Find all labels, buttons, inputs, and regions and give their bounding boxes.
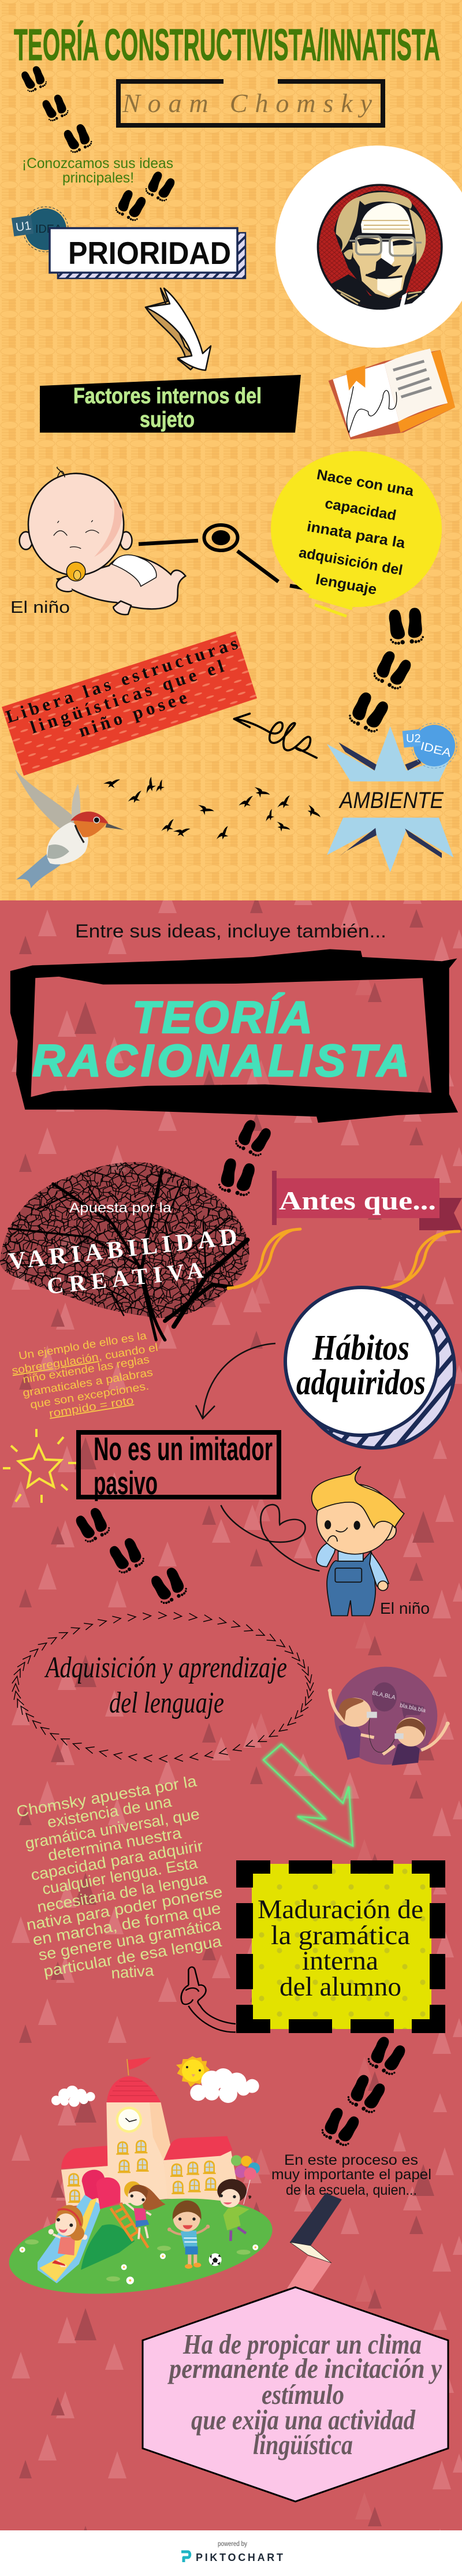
arrow: spiral from ambiente xyxy=(234,714,316,758)
icon: baby xyxy=(20,467,185,615)
footprints: to prioridad xyxy=(114,170,177,223)
brain tree: variabilidad creativa: CREATIVA xyxy=(46,1257,204,1299)
icon: boy xyxy=(312,1466,404,1615)
bulb: nace con una capacidad: adquisición del xyxy=(297,545,404,579)
icon: kids talking on cans xyxy=(328,1667,450,1766)
text: chomsky apuesta: se genere una gramática xyxy=(37,1915,223,1964)
text: ejemplo sobreregulación: niño extiende las reglas xyxy=(22,1353,150,1386)
grass xyxy=(3,2184,278,2309)
text: chomsky apuesta xyxy=(15,1772,224,1982)
text: ejemplo sobreregulación xyxy=(11,1330,159,1420)
hexagon: ha de propicar: Ha de propicar un clima xyxy=(182,2328,422,2360)
badge: idea 2: IDEA xyxy=(419,740,453,760)
text: chomsky apuesta: en marcha, de forma que xyxy=(31,1899,222,1949)
hexagon: ha de propicar: que exija una actividad xyxy=(191,2404,416,2436)
slide xyxy=(38,2170,148,2283)
footprints: to school text xyxy=(319,2034,408,2149)
text: chomsky apuesta: gramática universal, que xyxy=(24,1805,201,1852)
bulb: nace con una capacidad: lenguaje xyxy=(314,571,378,598)
kid in green xyxy=(217,2179,251,2241)
birds flock xyxy=(103,775,321,841)
text: chomsky apuesta: nativa para poder ponerse xyxy=(25,1883,224,1934)
footer: powered by piktochart: PIKTOCHART xyxy=(196,2552,283,2563)
icon: yellow star xyxy=(3,1429,76,1503)
kid on slide xyxy=(49,2205,87,2266)
box: no es un imitador pasivo: pasivo xyxy=(94,1465,158,1502)
icon: open book with signature xyxy=(329,348,455,440)
bulb: nace con una capacidad: capacidad xyxy=(323,495,397,524)
oval: adquisición y aprendizaje: Adquisición y aprendizaje xyxy=(44,1651,287,1684)
boy with ball xyxy=(167,2201,210,2269)
circle: hábitos adquiridos: Hábitos xyxy=(312,1328,409,1368)
label: el niño (boy): El niño xyxy=(380,1599,430,1617)
icon: kids talking on cans: bla.bla.bla xyxy=(399,1702,426,1714)
badge: ambiente star xyxy=(327,723,457,872)
footer background xyxy=(0,2530,462,2576)
frame: teoría racionalista xyxy=(10,949,458,1123)
text: en este proceso: muy importante el papel xyxy=(271,2166,431,2183)
text: chomsky apuesta: Chomsky apuesta por la xyxy=(15,1772,199,1821)
heart swirl line xyxy=(221,1505,319,1571)
arrow: neon green xyxy=(263,1744,353,1846)
text: chomsky apuesta: cualquier lengua. Esta xyxy=(41,1854,199,1898)
box: maduración de la gramática: Maduración de xyxy=(258,1894,423,1924)
icon: hummingbird xyxy=(15,769,124,888)
sun xyxy=(176,2056,210,2087)
name frame: Noam Chomsky xyxy=(118,81,383,125)
hexagon: ha de propicar: lingüística xyxy=(253,2429,353,2460)
footprints: to ambiente xyxy=(346,607,424,735)
subtitle: conozcamos: principales! xyxy=(62,170,134,186)
flag xyxy=(127,2057,151,2075)
box: maduración de la gramática xyxy=(236,1860,445,2033)
box: maduración de la gramática: la gramática xyxy=(271,1920,410,1950)
bulb: nace con una capacidad: innata para la xyxy=(305,518,407,552)
connector: baby to idea xyxy=(139,525,341,595)
banner: libera las estructuras: Libera las estructuras xyxy=(3,632,240,727)
text: chomsky apuesta: capacidad para adquirir xyxy=(29,1837,204,1884)
footer: powered by piktochart: powered by xyxy=(218,2541,247,2548)
badge: ambiente star: AMBIENTE xyxy=(338,788,444,813)
banner: factores internos: sujeto xyxy=(140,408,195,432)
banner: factores internos xyxy=(40,375,301,433)
swashes: orange xyxy=(228,1229,459,1289)
intro line: entre sus ideas: Entre sus ideas, incluye también... xyxy=(75,921,386,941)
oval: adquisición y aprendizaje xyxy=(16,1615,310,1759)
subtitle: conozcamos xyxy=(22,155,173,186)
badge: idea 1: IDEA xyxy=(35,223,62,236)
background: red section xyxy=(0,900,462,2530)
box: maduración de la gramática: interna xyxy=(302,1946,378,1976)
footprints: to lenguaje oval xyxy=(73,1506,189,1606)
portrait circle: Noam Chomsky xyxy=(275,146,462,348)
text: en este proceso xyxy=(271,2152,431,2198)
banner: antes que: Antes que... xyxy=(279,1186,436,1215)
text: chomsky apuesta: particular de esa lengua xyxy=(42,1933,223,1980)
illustration: school with kids xyxy=(3,2056,278,2309)
text: ejemplo sobreregulación: Un ejemplo de ello es la xyxy=(18,1330,148,1363)
icon: kids talking on cans: BLA,BLA xyxy=(372,1690,396,1701)
badge: idea 1 xyxy=(12,207,68,252)
banner: libera las estructuras: niño posee xyxy=(76,687,189,741)
balloons xyxy=(231,2155,260,2205)
circle: hábitos adquiridos: adquiridos xyxy=(296,1363,426,1402)
box: prioridad: PRIORIDAD xyxy=(68,235,231,271)
box: prioridad xyxy=(50,228,245,278)
text: chomsky apuesta: nativa xyxy=(110,1961,155,1982)
text: chomsky apuesta: determina nuestra xyxy=(47,1824,183,1864)
cloud right xyxy=(190,2068,259,2103)
footprints: top trail xyxy=(20,65,94,155)
banner: antes que xyxy=(272,1171,462,1230)
box: no es un imitador pasivo: No es un imitador xyxy=(94,1431,273,1468)
badge: idea 2: U2 xyxy=(406,732,421,745)
text: ejemplo sobreregulación: sobreregulación , cuando el xyxy=(11,1342,159,1377)
box: maduración de la gramática: del alumno xyxy=(280,1972,401,2002)
badge: idea 2 xyxy=(403,723,457,768)
hexagon: ha de propicar: estímulo xyxy=(262,2378,344,2410)
background: orange section xyxy=(0,0,462,900)
building xyxy=(61,2076,238,2206)
box: no es un imitador pasivo xyxy=(79,1431,279,1502)
bulb: nace con una capacidad xyxy=(271,451,442,616)
text: ejemplo sobreregulación: gramaticales a palabras xyxy=(22,1367,154,1399)
hexagon: ha de propicar xyxy=(143,2287,448,2501)
footer: powered by piktochart xyxy=(181,2541,283,2563)
brain tree: variabilidad creativa: VARIABILIDAD xyxy=(7,1223,239,1275)
tag: U1: U1 xyxy=(15,219,32,234)
flowers and tufts xyxy=(20,2239,258,2284)
cloud left xyxy=(51,2086,95,2107)
brain tree: variabilidad creativa: Apuesta por la xyxy=(69,1200,172,1216)
icon: folded ribbon arrow xyxy=(287,2193,342,2291)
text: en este proceso: En este proceso es xyxy=(284,2152,418,2168)
oval: adquisición y aprendizaje: del lenguaje xyxy=(109,1687,224,1719)
frame: teoría racionalista: RACIONALISTA xyxy=(32,1035,409,1086)
banner: libera las estructuras xyxy=(2,631,257,776)
soccer ball xyxy=(209,2253,222,2266)
text: en este proceso: de la escuela, quien... xyxy=(286,2182,417,2198)
kid with long hair xyxy=(125,2185,166,2239)
name frame: Noam Chomsky: Noam Chomsky xyxy=(122,88,372,118)
frame: teoría racionalista: TEORÍA xyxy=(132,992,312,1043)
circle: hábitos adquiridos xyxy=(285,1287,454,1448)
label: el niño (baby): El niño xyxy=(10,598,70,617)
text: ejemplo sobreregulación: que son excepciones. xyxy=(29,1380,150,1412)
brain tree: variabilidad creativa xyxy=(0,1159,254,1340)
subtitle: conozcamos: ¡Conozcamos sus ideas xyxy=(22,155,173,172)
icon: pointing hand xyxy=(181,1967,236,2032)
arrow: prioridad to factores xyxy=(146,288,211,370)
footprints: below frame xyxy=(217,1118,274,1198)
text: chomsky apuesta: necesitaria de la lengua xyxy=(36,1870,209,1916)
banner: factores internos: Factores internos del xyxy=(73,384,262,408)
banner: libera las estructuras: lingüísticas que el xyxy=(28,656,226,738)
text: chomsky apuesta: existencia de una xyxy=(46,1793,173,1831)
arrow: curved down xyxy=(196,1343,275,1419)
bulb: nace con una capacidad: Nace con una xyxy=(315,467,416,500)
text: ejemplo sobreregulación: rompido = roto xyxy=(48,1394,135,1420)
